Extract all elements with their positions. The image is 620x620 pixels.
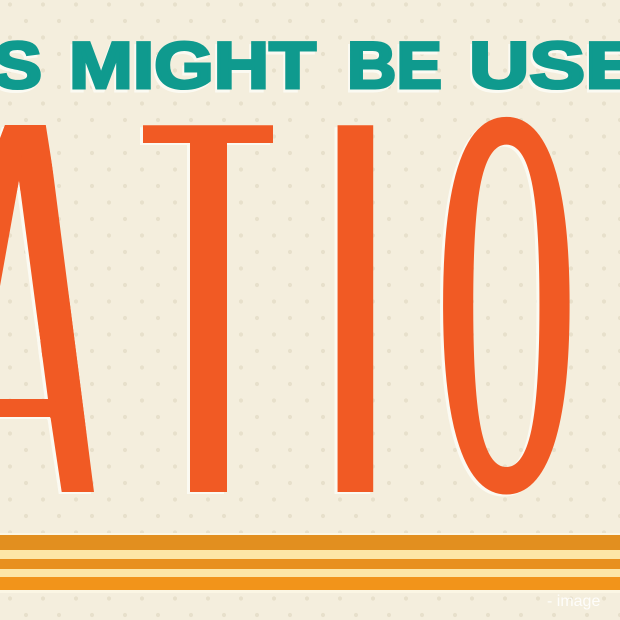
- letter I: I: [321, 11, 390, 606]
- letter T: T: [126, 10, 291, 606]
- watermark: - image: [547, 593, 600, 610]
- heading: teal line of text: [0, 28, 620, 102]
- heading: teal line of text: BE: [347, 28, 442, 102]
- letter O: O: [434, 0, 579, 611]
- heading: teal line of text: MIGHT: [69, 28, 316, 102]
- heading: teal line of text: USE: [469, 28, 620, 102]
- large orange word: ATIO: [0, 116, 570, 496]
- decorative orange stripe band: [0, 533, 620, 593]
